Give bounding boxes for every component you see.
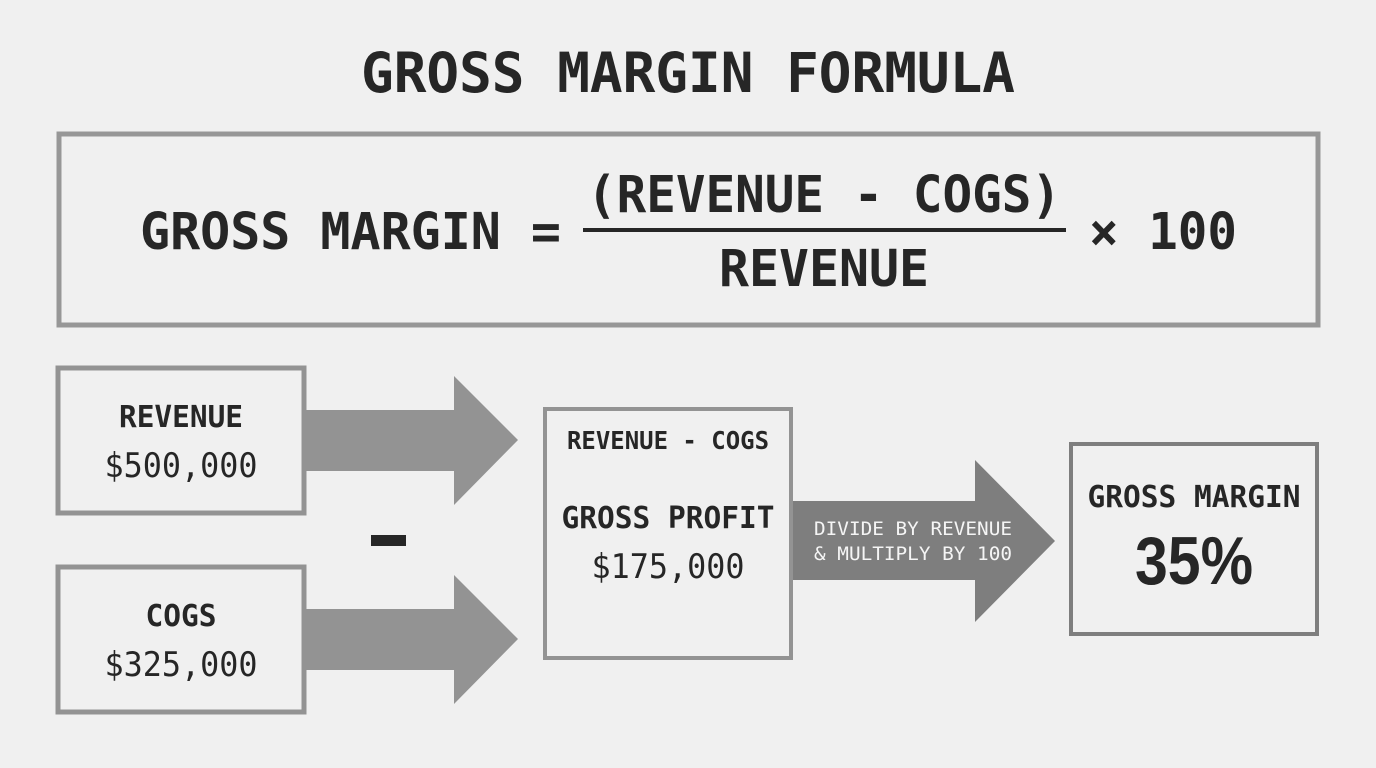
- gross profit value: $175,000: [592, 547, 744, 587]
- result label: GROSS MARGIN: [1088, 480, 1300, 515]
- revenue label: REVENUE: [119, 400, 243, 435]
- cogs label: COGS: [146, 599, 216, 634]
- fraction bar: [583, 228, 1066, 232]
- formula multiplier: × 100: [1089, 203, 1237, 262]
- cogs value: $325,000: [104, 645, 258, 685]
- panel: cogs: [58, 567, 304, 712]
- formula denominator: REVENUE: [719, 240, 929, 299]
- arrow label line 2: & MULTIPLY BY 100: [814, 543, 1012, 565]
- panel: gross profit: [545, 409, 791, 658]
- title: GROSS MARGIN FORMULA: [361, 41, 1015, 105]
- arrow: cogs to gross profit: [304, 575, 518, 704]
- gross profit formula: REVENUE - COGS: [567, 426, 769, 455]
- panel: revenue: [58, 368, 304, 513]
- arrow label line 1: DIVIDE BY REVENUE: [814, 518, 1012, 540]
- revenue value: $500,000: [104, 446, 258, 486]
- panel: formula: [59, 134, 1318, 325]
- arrow: divide and multiply: [793, 460, 1055, 622]
- formula numerator: (REVENUE - COGS): [587, 166, 1061, 225]
- minus sign: [371, 535, 406, 546]
- panel: gross margin result: [1071, 444, 1317, 634]
- formula left side: GROSS MARGIN =: [140, 203, 561, 262]
- gross profit label: GROSS PROFIT: [562, 501, 774, 536]
- result value: 35%: [1135, 523, 1253, 599]
- arrow: revenue to gross profit: [304, 376, 518, 505]
